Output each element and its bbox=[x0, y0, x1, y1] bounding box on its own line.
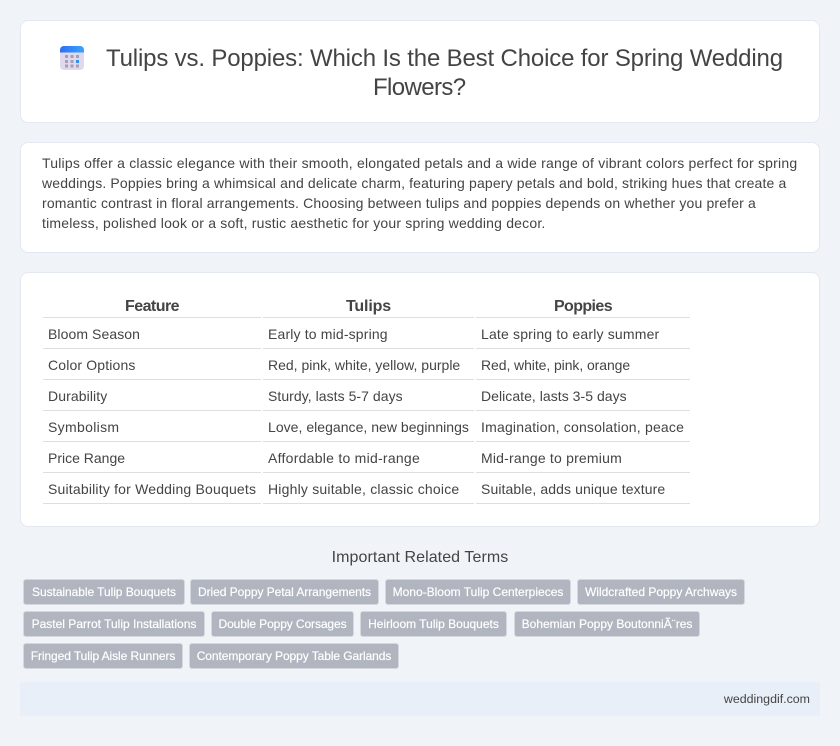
related term tags: Bohemian Poppy BoutonniÃ¨res bbox=[522, 617, 692, 631]
comparison table: Red, white, pink, orange bbox=[481, 357, 630, 373]
comparison table: Late spring to early summer bbox=[481, 326, 659, 342]
comparison table: Symbolism bbox=[48, 419, 119, 435]
comparison table: Poppies bbox=[554, 298, 612, 315]
comparison table: Bloom Season bbox=[48, 326, 140, 342]
title second line: Flowers? bbox=[373, 74, 466, 101]
related term tags: Double Poppy Corsages bbox=[218, 617, 346, 631]
panel: comparison table bbox=[20, 272, 820, 527]
related term tags: Pastel Parrot Tulip Installations bbox=[32, 617, 196, 631]
comparison table: Delicate, lasts 3-5 days bbox=[481, 388, 627, 404]
comparison table: Suitability for Wedding Bouquets bbox=[48, 481, 256, 497]
related term tags: Fringed Tulip Aisle Runners bbox=[31, 649, 175, 663]
comparison table: Durability bbox=[48, 388, 107, 404]
panel: intro text bbox=[20, 142, 820, 253]
related term tags: Contemporary Poppy Table Garlands bbox=[197, 649, 391, 663]
related term tags bbox=[23, 579, 745, 669]
related term tags: Sustainable Tulip Bouquets bbox=[32, 585, 176, 599]
title: Tulips vs. Poppies: Which Is the Best Choice for Spring Wedding bbox=[106, 45, 783, 72]
comparison table: Highly suitable, classic choice bbox=[268, 481, 459, 497]
comparison table: Mid-range to premium bbox=[481, 450, 622, 466]
comparison table: Feature bbox=[125, 298, 179, 315]
intro paragraph: weddings. Poppies bring a whimsical and delicate charm, featuring papery petals and bold, striking hues that create a bbox=[42, 175, 786, 191]
related term tags: Dried Poppy Petal Arrangements bbox=[198, 585, 371, 599]
intro paragraph bbox=[42, 155, 797, 231]
comparison table: Red, pink, white, yellow, purple bbox=[268, 357, 460, 373]
related terms heading: Important Related Terms bbox=[332, 549, 508, 566]
comparison table: Love, elegance, new beginnings bbox=[268, 419, 469, 435]
comparison table: Color Options bbox=[48, 357, 136, 373]
footer bar bbox=[20, 682, 820, 716]
intro paragraph: timeless, polished look or a soft, rustic aesthetic for your spring wedding decor. bbox=[42, 215, 546, 231]
related term tags: Wildcrafted Poppy Archways bbox=[585, 585, 737, 599]
footer source: weddingdif.com bbox=[724, 692, 810, 706]
panel: title card bbox=[20, 20, 820, 123]
related term tags: Heirloom Tulip Bouquets bbox=[368, 617, 499, 631]
icon: calendar bbox=[60, 46, 84, 70]
comparison table: Sturdy, lasts 5-7 days bbox=[268, 388, 403, 404]
comparison table: Suitable, adds unique texture bbox=[481, 481, 665, 497]
comparison table: Price Range bbox=[48, 450, 125, 466]
comparison table bbox=[43, 298, 690, 504]
comparison table: Early to mid-spring bbox=[268, 326, 388, 342]
comparison table: Affordable to mid-range bbox=[268, 450, 420, 466]
comparison table: Tulips bbox=[346, 298, 391, 315]
comparison table: Imagination, consolation, peace bbox=[481, 419, 684, 435]
related term tags: Mono-Bloom Tulip Centerpieces bbox=[393, 585, 563, 599]
intro paragraph: romantic contrast in floral arrangements. Choosing between tulips and poppies depends on whether you prefer a bbox=[42, 195, 756, 211]
intro paragraph: Tulips offer a classic elegance with their smooth, elongated petals and a wide range of vibrant colors perfect for spring bbox=[42, 155, 797, 171]
